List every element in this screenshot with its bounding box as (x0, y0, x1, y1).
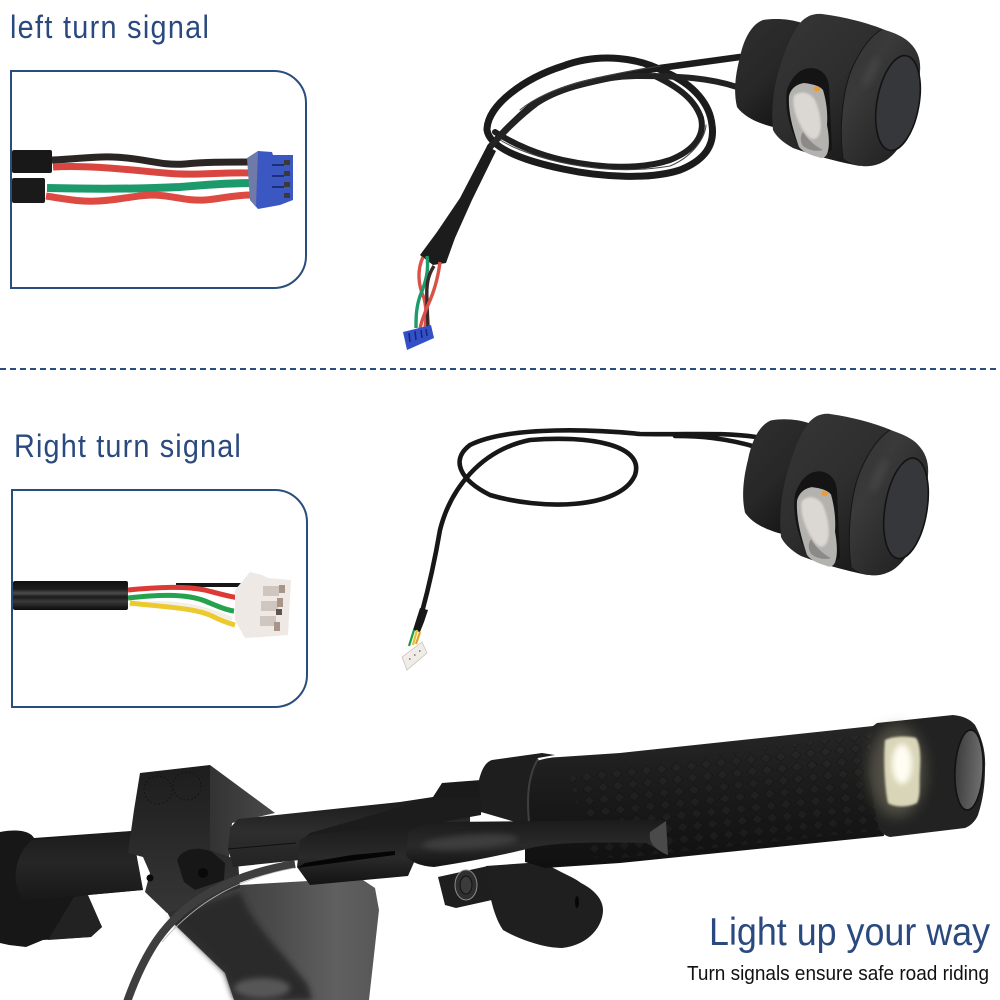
lit lens glow (869, 725, 925, 817)
block lower recess (177, 849, 225, 890)
stem (167, 878, 379, 1000)
brake housing (297, 824, 430, 885)
cable: lower sleeve (12, 178, 45, 203)
panel: right connector close-up (12, 490, 307, 707)
rubber grip (525, 726, 884, 868)
divider: dashed line (0, 368, 1000, 370)
title: right turn signal: Right turn signal (14, 429, 241, 464)
mount block side (200, 765, 275, 870)
mount block face (128, 765, 240, 913)
panel: left connector close-up (11, 71, 306, 288)
icon: right turn signal unit (743, 414, 935, 575)
product: left cable loop (420, 57, 740, 265)
lever arm wedge (300, 797, 481, 842)
icon: white connector close-up (235, 572, 291, 638)
grip collar (479, 753, 555, 826)
icon: blue connector close-up (247, 151, 293, 209)
icon: left turn signal unit (735, 14, 927, 166)
wires: right connector leads (409, 630, 420, 646)
brake lever (406, 820, 668, 867)
stem highlight (234, 978, 290, 998)
product: scooter handlebar with lit turn signal (0, 715, 985, 1000)
wires: close-up right connector (128, 585, 243, 625)
button (953, 729, 985, 811)
wires: close-up left connector (46, 157, 252, 201)
left bar (16, 831, 143, 901)
lower pivot small knob (438, 866, 492, 908)
lit lens (884, 737, 920, 806)
block screws (146, 868, 208, 882)
bar seam (228, 843, 296, 849)
icon: blue connector (403, 325, 434, 350)
brake cable (127, 864, 295, 1000)
wires: left connector leads (416, 256, 440, 329)
cable: thick sleeve (13, 581, 128, 610)
pivot plate hole (575, 896, 579, 908)
lever pivot plate (486, 862, 603, 948)
cable sheen (500, 66, 706, 170)
end cap (868, 715, 985, 837)
inner loop strand (495, 76, 702, 167)
block dot grill (144, 772, 201, 804)
clamp neck (433, 780, 483, 817)
lower wire to housing (492, 76, 737, 145)
left wing (48, 895, 102, 940)
caption: turn signals ensure safe road riding: Turn signals ensure safe road riding (687, 963, 989, 985)
tapered sleeve (413, 608, 428, 632)
middle bar (228, 797, 470, 867)
icon: white connector (402, 642, 427, 670)
cable: upper sleeve (12, 150, 52, 173)
stem shade (170, 892, 312, 1000)
tapered sleeves (420, 146, 496, 265)
left bar end (0, 830, 143, 947)
outer loop strand (487, 58, 713, 176)
lever highlight (422, 832, 518, 852)
brake slot (297, 851, 395, 868)
title: left turn signal: left turn signal (10, 10, 209, 45)
product: right cable loop (413, 430, 756, 632)
grip texture (570, 734, 880, 858)
lever tip (650, 821, 668, 855)
collar highlight (528, 759, 538, 822)
upper wire to housing (490, 57, 740, 147)
